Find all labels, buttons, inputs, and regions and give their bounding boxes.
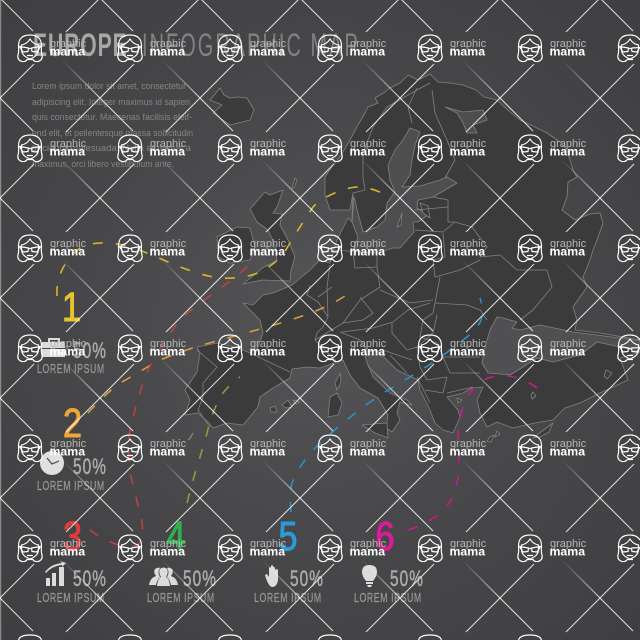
percent: 50%: [73, 339, 106, 364]
watermark lattice and logos: mama: [150, 44, 185, 58]
route 6 magenta: [408, 376, 540, 530]
watermark lattice and logos: graphic: [50, 38, 87, 50]
percent: 50%: [390, 567, 423, 592]
watermark lattice and logos: mama: [150, 244, 185, 258]
route 2 orange: [88, 291, 352, 413]
watermark lattice and logos: graphic: [150, 338, 187, 350]
watermark lattice and logos: graphic: [550, 338, 587, 350]
watermark lattice and logos: mama: [350, 44, 385, 58]
item 6: [354, 513, 423, 605]
watermark lattice and logos: mama: [550, 244, 585, 258]
watermark lattice and logos: mama: [150, 144, 185, 158]
watermark lattice and logos: graphic: [250, 238, 287, 250]
watermark lattice and logos: graphic: [50, 338, 87, 350]
item 4: [147, 513, 216, 605]
percent: 50%: [73, 567, 106, 592]
Iceland: [210, 88, 254, 125]
caption: LOREM IPSUM: [354, 592, 421, 605]
percent: 50%: [183, 567, 216, 592]
heading: infographic map: INFOGRAPHIC MAP: [142, 27, 358, 63]
watermark lattice and logos: mama: [150, 344, 185, 358]
watermark lattice and logos: graphic: [450, 238, 487, 250]
percent: 50%: [73, 455, 106, 480]
watermark lattice and logos: mama: [150, 544, 185, 558]
watermark lattice and logos: mama: [550, 544, 585, 558]
caption: LOREM IPSUM: [37, 480, 104, 493]
watermark lattice and logos: mama: [450, 44, 485, 58]
number 1: 1: [62, 284, 81, 330]
country borders: [197, 83, 552, 427]
percent: 50%: [290, 567, 323, 592]
icon: light bulb: [362, 565, 377, 587]
watermark lattice and logos: mama: [450, 444, 485, 458]
route 1 yellow: [57, 187, 384, 296]
watermark lattice and logos: graphic: [350, 538, 387, 550]
icon: growth chart: [45, 561, 66, 586]
number 5: 5: [278, 513, 298, 559]
item 2: [37, 400, 106, 493]
watermark lattice and logos: graphic: [450, 38, 487, 50]
watermark lattice and logos: graphic: [450, 438, 487, 450]
watermark lattice and logos: graphic: [250, 438, 287, 450]
caption: LOREM IPSUM: [37, 363, 104, 376]
number 6: 6: [376, 513, 394, 559]
item 3: [37, 513, 106, 605]
icon: people: [149, 568, 178, 586]
watermark lattice and logos: mama: [550, 344, 585, 358]
watermark lattice and logos: graphic: [350, 438, 387, 450]
watermark lattice and logos: mama: [250, 244, 285, 258]
icon: briefcase: [42, 338, 65, 357]
intro paragraph: adipiscing elit. Integer maximus id sapien: [32, 97, 190, 107]
watermark lattice and logos: graphic: [450, 538, 487, 550]
watermark lattice and logos: mama: [350, 244, 385, 258]
item 5: [254, 513, 323, 605]
watermark lattice and logos: graphic: [50, 238, 87, 250]
caption: LOREM IPSUM: [147, 592, 214, 605]
watermark lattice and logos: mama: [450, 144, 485, 158]
watermark lattice and logos: graphic: [150, 138, 187, 150]
intro paragraph: Lorem ipsum dolor sit amet, consectetur: [32, 81, 186, 91]
watermark lattice and logos: mama: [250, 544, 285, 558]
route 4 green: [187, 377, 240, 503]
watermark lattice and logos: mama: [350, 544, 385, 558]
watermark lattice and logos: mama: [350, 444, 385, 458]
caption: LOREM IPSUM: [37, 592, 104, 605]
watermark lattice and logos: graphic: [450, 138, 487, 150]
number 4: 4: [166, 513, 186, 559]
intro paragraph: tincidunt malesuada. Nulla at metus a: [32, 143, 191, 153]
watermark lattice and logos: mama: [150, 444, 185, 458]
heading: Europe: EUROPE: [33, 26, 127, 63]
Baltic sea: [352, 128, 457, 253]
watermark lattice and logos: graphic: [350, 238, 387, 250]
watermark lattice and logos: mama: [50, 444, 85, 458]
watermark lattice and logos: graphic: [350, 338, 387, 350]
watermark lattice and logos: mama: [250, 44, 285, 58]
watermark lattice and logos: mama: [250, 144, 285, 158]
watermark lattice and logos: graphic: [350, 38, 387, 50]
item 1: [37, 284, 106, 376]
watermark lattice and logos: mama: [50, 344, 85, 358]
watermark lattice and logos: mama: [250, 344, 285, 358]
watermark lattice and logos: graphic: [550, 238, 587, 250]
watermark lattice and logos: graphic: [50, 138, 87, 150]
watermark lattice and logos: mama: [550, 144, 585, 158]
White sea: [445, 107, 487, 133]
Ireland: [217, 227, 255, 263]
watermark lattice and logos: mama: [50, 44, 85, 58]
route 3 red: [90, 258, 257, 547]
intro paragraph: end elit, et pellentesque massa sollicitudin: [32, 128, 193, 138]
intro paragraph: quis consectetur. Maecenas facilisis eleif-: [32, 112, 192, 122]
watermark lattice and logos: mama: [50, 144, 85, 158]
watermark lattice and logos: graphic: [550, 438, 587, 450]
icon: hand: [265, 565, 278, 587]
watermark lattice and logos: mama: [250, 444, 285, 458]
watermark lattice and logos: graphic: [250, 138, 287, 150]
watermark lattice and logos: mama: [550, 444, 585, 458]
number 2: 2: [63, 400, 82, 446]
watermark lattice and logos: graphic: [250, 38, 287, 50]
watermark lattice and logos: graphic: [50, 438, 87, 450]
watermark lattice and logos: graphic: [50, 538, 87, 550]
watermark lattice and logos: graphic: [350, 138, 387, 150]
watermark lattice and logos: mama: [50, 244, 85, 258]
watermark lattice and logos: graphic: [550, 38, 587, 50]
watermark lattice and logos: mama: [50, 544, 85, 558]
Great Britain: [243, 190, 295, 284]
title: [33, 26, 358, 63]
route 5 blue: [290, 298, 482, 512]
intro paragraph: [32, 81, 193, 169]
watermark lattice and logos: mama: [450, 244, 485, 258]
Black sea: [482, 317, 640, 375]
watermark lattice and logos: mama: [350, 344, 385, 358]
watermark lattice and logos: mama: [550, 44, 585, 58]
watermark lattice and logos: graphic: [450, 338, 487, 350]
watermark lattice and logos: graphic: [550, 138, 587, 150]
watermark lattice and logos: mama: [450, 344, 485, 358]
icon: clock: [40, 451, 64, 475]
watermark lattice and logos: graphic: [150, 538, 187, 550]
dashed routes: [57, 187, 540, 547]
number 3: 3: [63, 513, 82, 559]
watermark lattice and logos: graphic: [150, 238, 187, 250]
watermark lattice and logos: graphic: [150, 438, 187, 450]
intro paragraph: maximus, orci libero vestibulum ante.: [32, 159, 174, 169]
islands: [188, 178, 612, 442]
watermark lattice and logos: graphic: [550, 538, 587, 550]
watermark lattice and logos: mama: [450, 544, 485, 558]
watermark lattice and logos: graphic: [250, 338, 287, 350]
watermark lattice and logos: graphic: [250, 538, 287, 550]
map of Europe: [185, 74, 640, 442]
caption: LOREM IPSUM: [254, 592, 321, 605]
watermark lattice and logos: mama: [350, 144, 385, 158]
watermark lattice and logos: graphic: [150, 38, 187, 50]
continental land mass: [185, 74, 640, 433]
